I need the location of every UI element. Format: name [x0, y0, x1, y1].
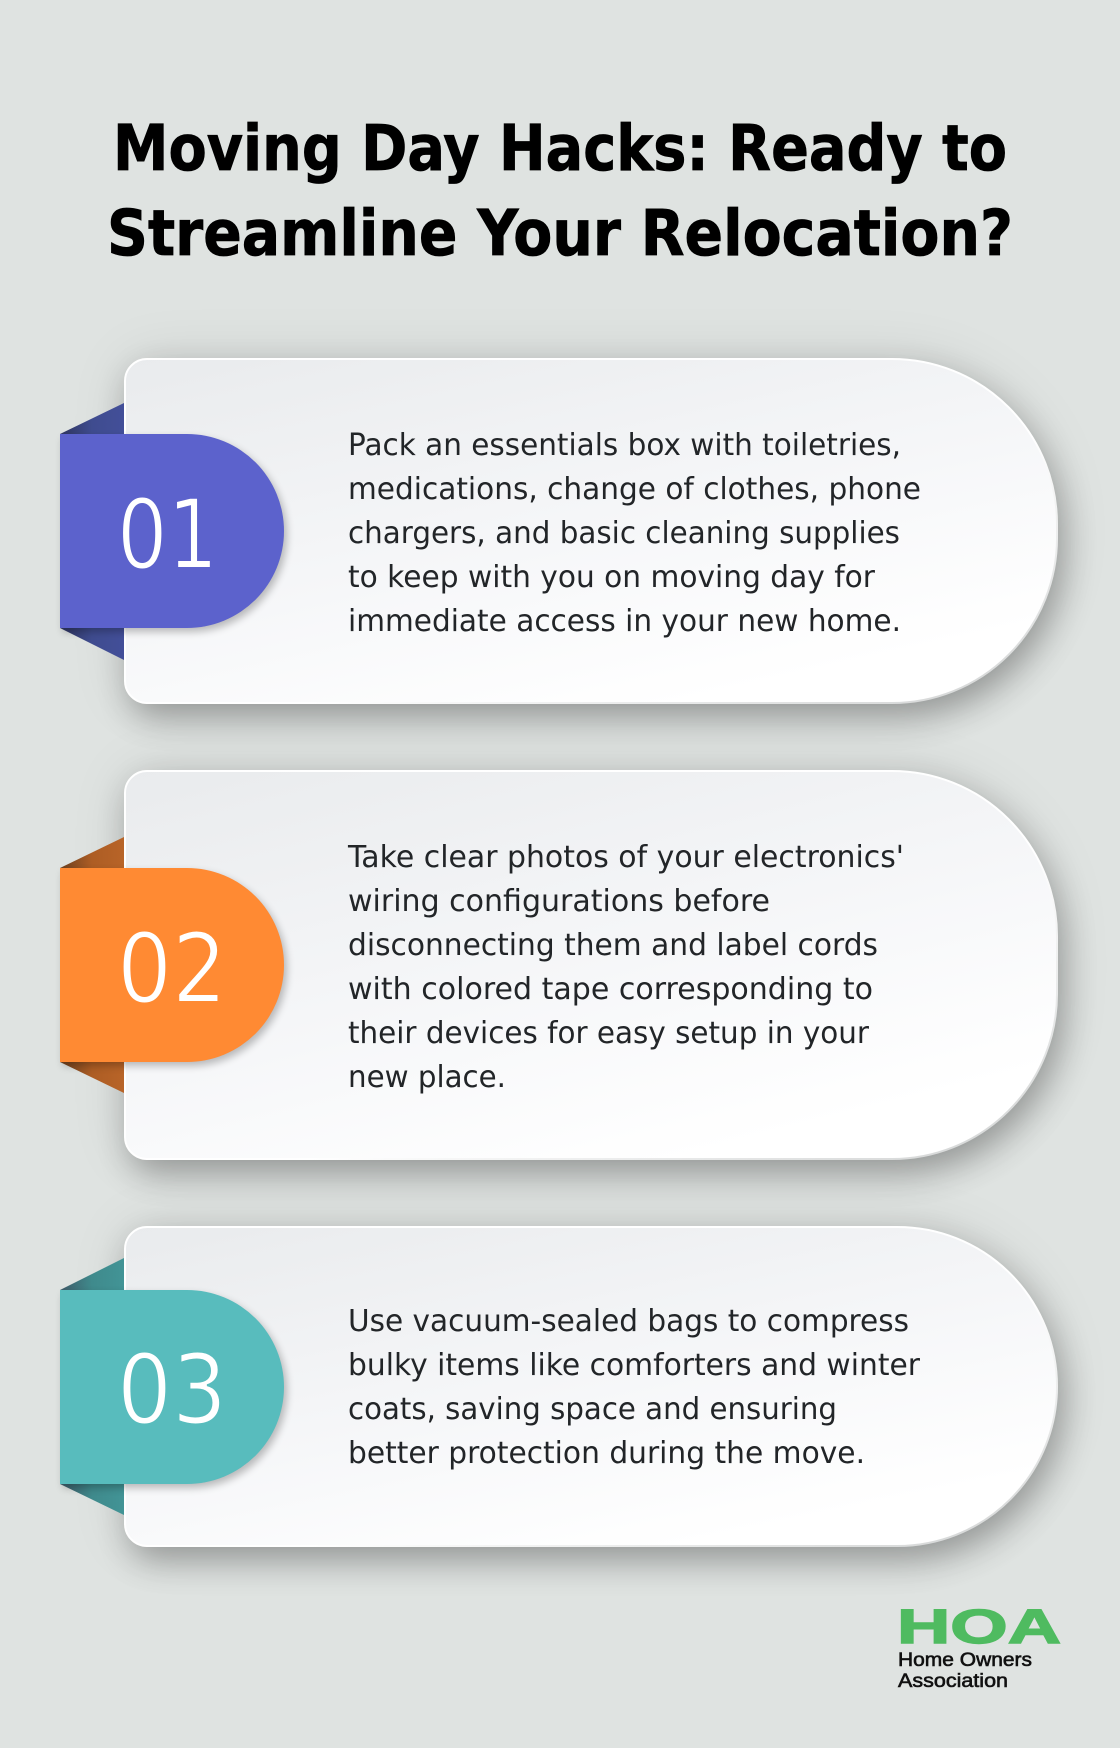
text: step 3: bulky items like comforters and winter — [348, 1348, 920, 1383]
title — [107, 112, 1013, 270]
text: step 2: disconnecting them and label cords — [348, 928, 878, 963]
text: step 2: their devices for easy setup in your — [348, 1016, 869, 1051]
text: step 2: new place. — [348, 1060, 506, 1095]
text: step 3: better protection during the move. — [348, 1436, 865, 1471]
text: step 1: chargers, and basic cleaning supplies — [348, 516, 900, 551]
card: step 2 — [125, 771, 1057, 1159]
number badge: step 1: 01 — [117, 479, 218, 591]
text: step 1: medications, change of clothes, phone — [348, 472, 921, 507]
text: step 1: to keep with you on moving day for — [348, 560, 875, 595]
title: Streamline Your Relocation? — [107, 197, 1013, 270]
number badge: step 3 — [60, 1290, 284, 1484]
number badge: step 1 — [60, 434, 284, 628]
number badge: step 2: 02 — [117, 913, 227, 1025]
card: step 3 — [125, 1227, 1057, 1546]
text: step 1 — [348, 428, 921, 639]
number badge: step 3: 03 — [117, 1334, 227, 1446]
logo: HOA Home Owners Association — [897, 1601, 1061, 1692]
logo: HOA Home Owners Association: Association — [898, 1671, 1008, 1692]
text: step 2: Take clear photos of your electronics' — [347, 840, 904, 875]
text: step 1: immediate access in your new home. — [348, 604, 901, 639]
text: step 1: Pack an essentials box with toiletries, — [348, 428, 901, 463]
text: step 3: coats, saving space and ensuring — [348, 1392, 837, 1427]
text: step 3 — [348, 1304, 920, 1471]
logo: HOA Home Owners Association: Home Owners — [898, 1650, 1032, 1671]
card: step 1 — [125, 359, 1057, 703]
title: Moving Day Hacks: Ready to — [113, 112, 1007, 185]
number badge: step 2 — [60, 868, 284, 1062]
text: step 2 — [347, 840, 904, 1095]
logo: HOA Home Owners Association: HOA — [897, 1601, 1061, 1654]
panel: step 3 — [60, 1227, 1063, 1560]
ribbon fold: step 3 — [60, 1258, 124, 1515]
text: step 3: Use vacuum-sealed bags to compress — [348, 1304, 909, 1339]
text: step 2: with colored tape corresponding to — [348, 972, 873, 1007]
ribbon fold: step 2 — [60, 837, 124, 1093]
panel: step 1 — [60, 359, 1063, 717]
text: step 2: wiring configurations before — [348, 884, 770, 919]
ribbon fold: step 1 — [60, 403, 124, 660]
panel: step 2 — [60, 771, 1063, 1173]
